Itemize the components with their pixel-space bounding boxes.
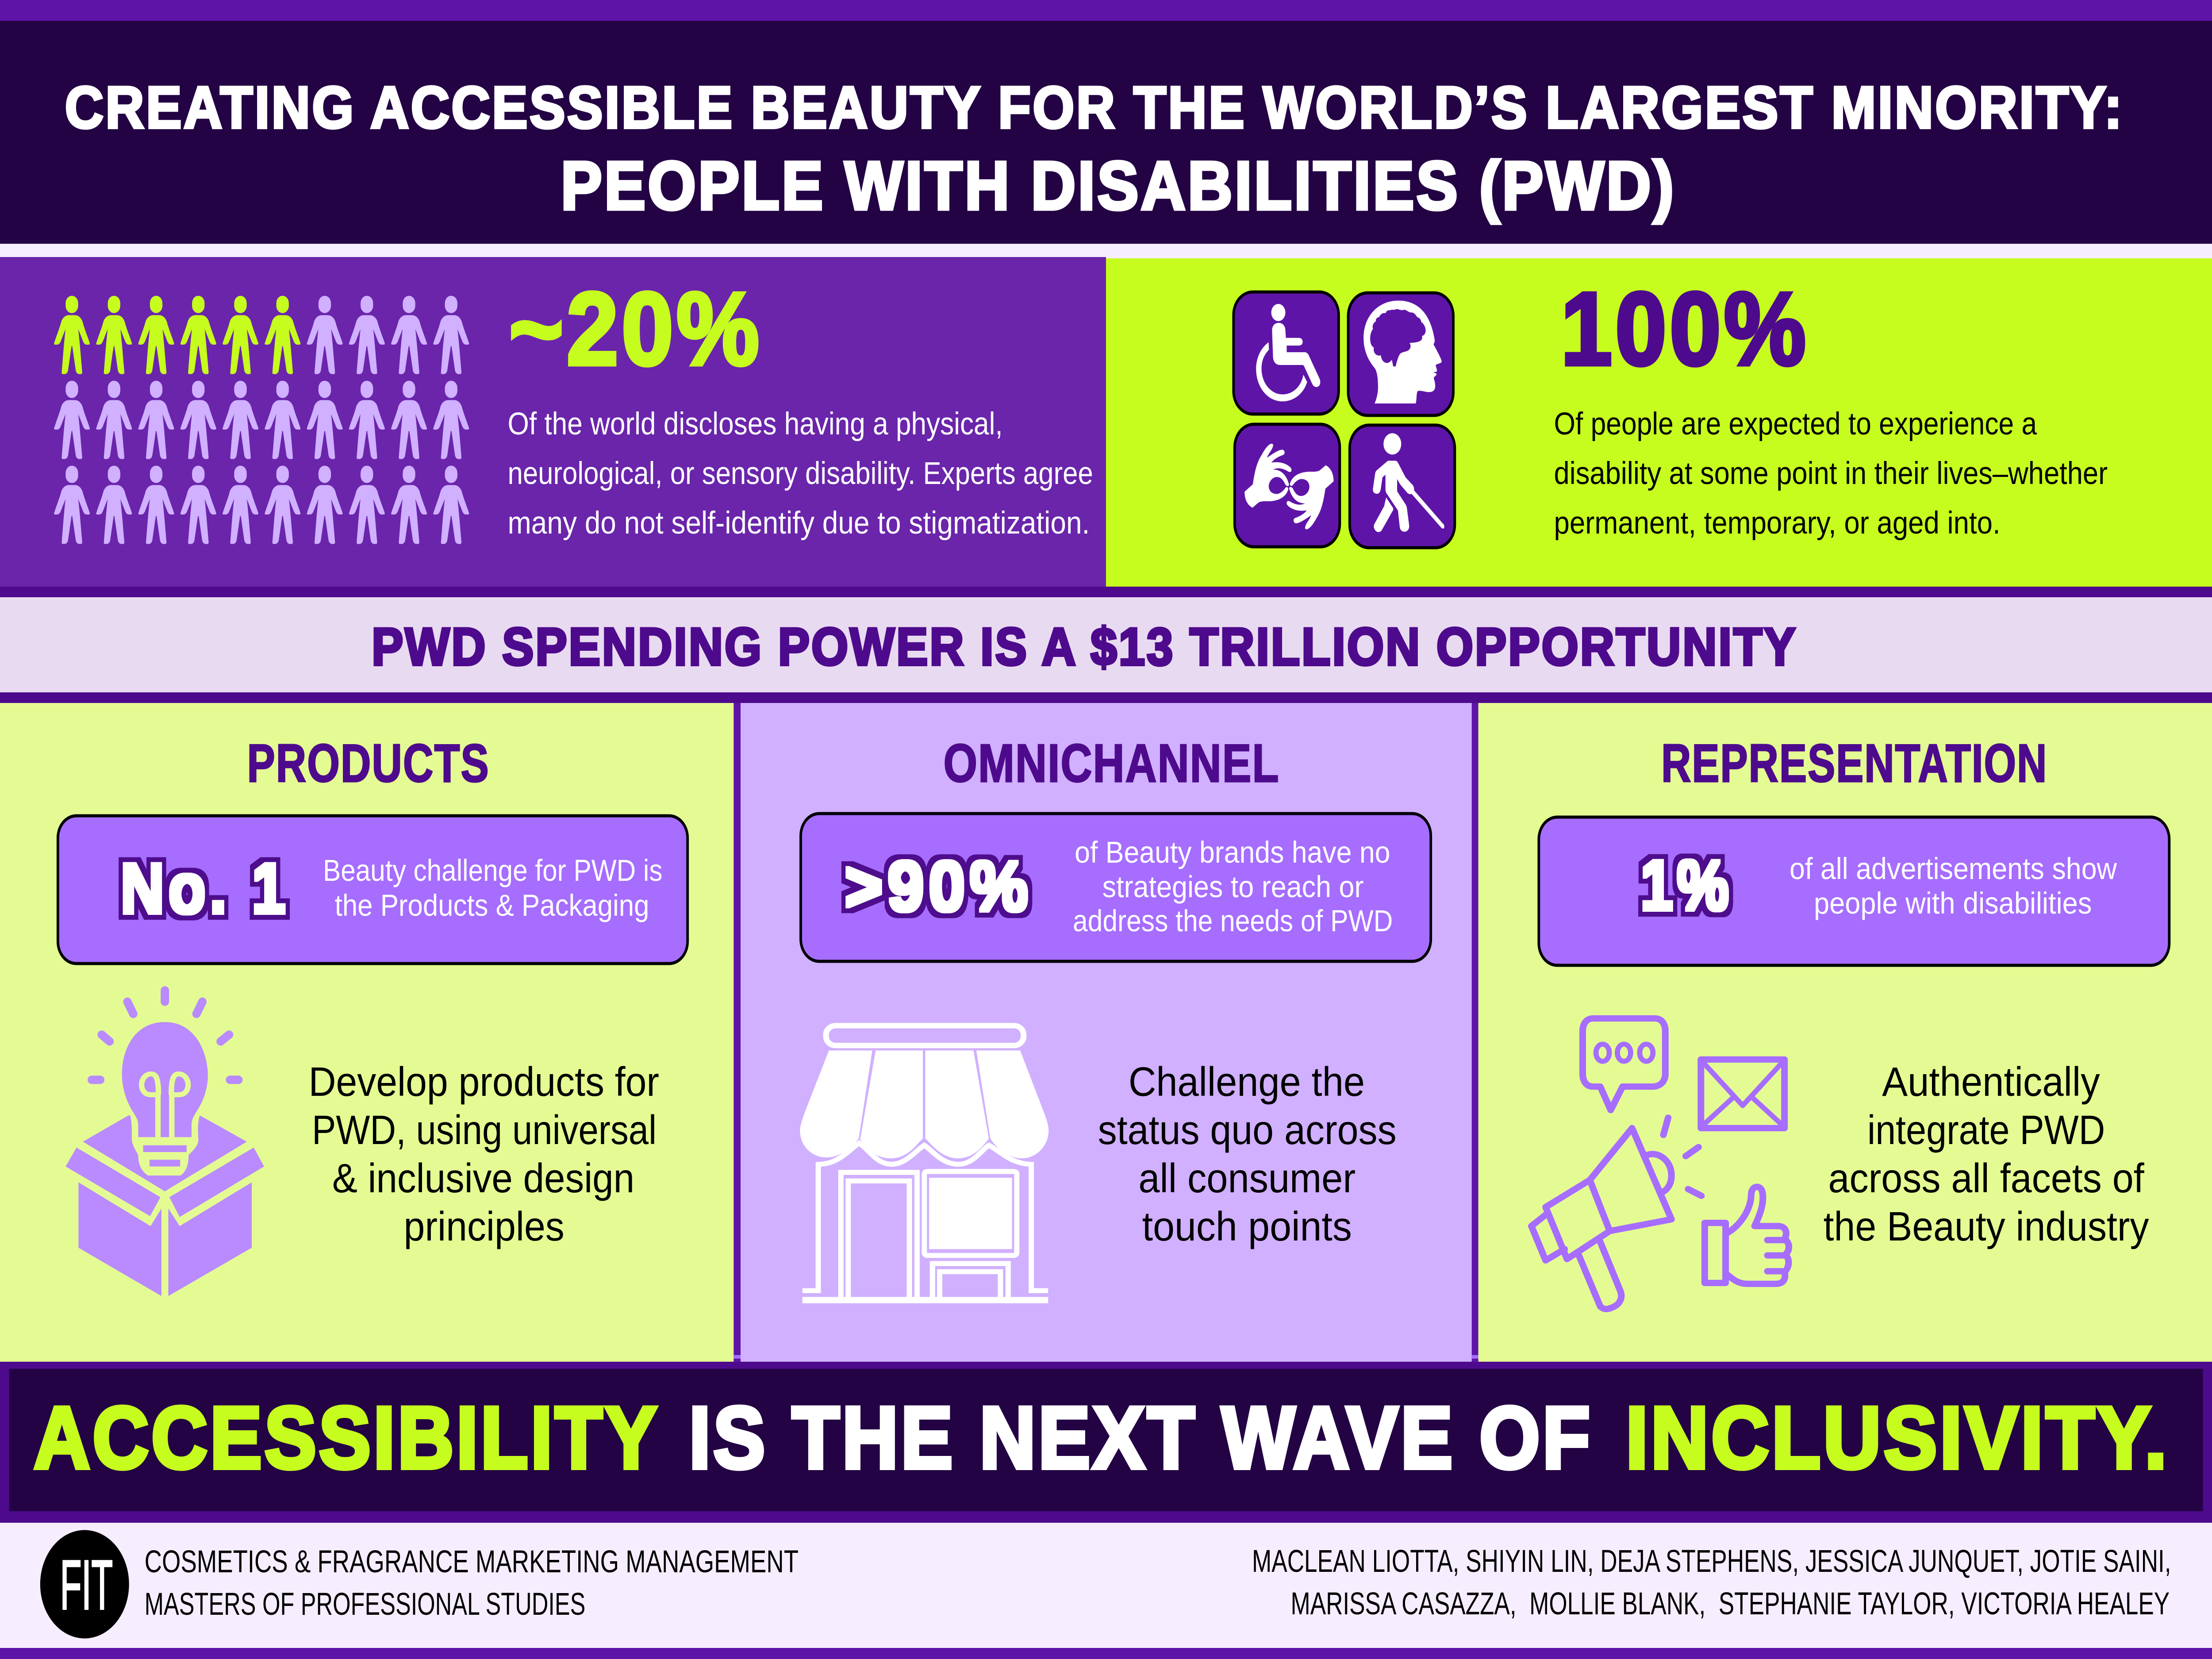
row 1 of people — [54, 296, 469, 374]
text: representation recommendation: integrate PWD — [1867, 1107, 2105, 1153]
stat: 1%: 1% — [1640, 847, 1733, 925]
description: 20 percent: neurological, or sensory disability. Experts agree — [508, 456, 1093, 491]
heading: omnichannel: OMNICHANNEL — [944, 733, 1280, 793]
footer — [40, 1530, 2171, 1639]
stat description: the Products & Packaging — [335, 889, 649, 922]
footer: authors — [1252, 1544, 2171, 1621]
stat: >90%: >90% — [845, 848, 1033, 926]
description: 20 percent: Of the world discloses having a physical, — [508, 406, 1003, 441]
icon: light bulb in box — [65, 991, 264, 1296]
text: omnichannel recommendation: Challenge the — [1129, 1059, 1365, 1105]
banner heading: PWD SPENDING POWER IS A $13 TRILLION OPPORTUNITY — [372, 617, 1797, 676]
stat description: of all advertisements show — [1790, 852, 2117, 886]
text: omnichannel recommendation — [1098, 1059, 1397, 1250]
description: 100 percent: permanent, temporary, or aged into. — [1554, 505, 2001, 540]
text: products recommendation: & inclusive design — [332, 1156, 634, 1202]
title line 1: CREATING ACCESSIBLE BEAUTY FOR THE WORLD’S LARGEST MINORITY: — [65, 74, 2124, 141]
row 2 of people — [54, 381, 469, 459]
stat description — [1790, 852, 2117, 920]
footer: program — [145, 1544, 799, 1621]
logo: FIT — [40, 1530, 129, 1639]
text: omnichannel recommendation: all consumer — [1138, 1156, 1356, 1202]
title line 2: PEOPLE WITH DISABILITIES (PWD) — [561, 148, 1676, 224]
icon: sign language hands — [1235, 424, 1340, 547]
text: products recommendation: Develop products for — [309, 1059, 659, 1105]
text: products recommendation — [309, 1059, 659, 1250]
icon: storefront — [800, 1025, 1048, 1300]
text: representation recommendation: the Beauty industry — [1824, 1204, 2149, 1250]
text: products recommendation: PWD, using universal — [312, 1107, 657, 1153]
spending power banner — [0, 597, 2212, 692]
footer: program: MASTERS OF PROFESSIONAL STUDIES — [145, 1586, 585, 1621]
description: 100 percent: Of people are expected to experience a — [1554, 406, 2037, 441]
stat description — [323, 854, 663, 922]
heading: products: PRODUCTS — [247, 733, 490, 793]
text: omnichannel recommendation: status quo across — [1098, 1107, 1397, 1153]
description: 20 percent: many do not self-identify due to stigmatization. — [508, 505, 1090, 540]
icon: megaphone, mail, chat and thumbs up — [1532, 1018, 1789, 1309]
icon: head with brain — [1348, 293, 1453, 415]
description: 100 percent — [1554, 406, 2108, 540]
text: products recommendation: principles — [404, 1204, 565, 1250]
text: representation recommendation: across all facets of — [1828, 1156, 2144, 1202]
panel: omnichannel — [741, 703, 1472, 1362]
closing banner — [0, 1362, 2212, 1523]
panel: products — [0, 703, 733, 1362]
stat description: Beauty challenge for PWD is — [323, 854, 662, 887]
icon: person with cane — [1350, 425, 1455, 548]
stat description: strategies to reach or — [1102, 870, 1363, 904]
panel: 20 percent statistic — [0, 257, 1106, 587]
stat description: people with disabilities — [1814, 887, 2092, 920]
panel: 100 percent statistic — [1106, 258, 2212, 587]
footer: program: COSMETICS & FRAGRANCE MARKETING MANAGEMENT — [145, 1544, 799, 1579]
stat box: 1 percent — [1539, 817, 2169, 965]
title banner — [0, 21, 2212, 244]
stat: No. 1: No. 1 — [120, 850, 290, 928]
statistic: ~20%: ~20% — [509, 271, 762, 387]
description: 20 percent — [508, 406, 1093, 540]
stat description: of Beauty brands have no — [1075, 836, 1390, 869]
stat box: over 90 percent — [801, 814, 1431, 961]
closing line: accessibility: ACCESSIBILITY — [34, 1389, 660, 1486]
description: 100 percent: disability at some point in their lives–whether — [1554, 456, 2108, 491]
heading: representation: REPRESENTATION — [1661, 733, 2047, 793]
icon tiles: disabilities — [1233, 292, 1455, 548]
statistic: 100%: 100% — [1561, 271, 1809, 387]
stat description — [1073, 836, 1393, 938]
icon: wheelchair — [1233, 292, 1339, 414]
closing line: inclusivity: INCLUSIVITY. — [1626, 1389, 2170, 1486]
logo: FIT: FIT — [60, 1546, 113, 1624]
text: representation recommendation: Authentically — [1882, 1059, 2100, 1105]
closing line: middle: IS THE NEXT WAVE OF — [689, 1389, 1593, 1486]
text: representation recommendation — [1824, 1059, 2149, 1250]
stat box: No. 1 — [58, 816, 687, 964]
panel: representation — [1479, 703, 2212, 1362]
text: omnichannel recommendation: touch points — [1142, 1204, 1352, 1250]
pictogram: 30 people, 6 highlighted — [54, 296, 469, 544]
row 3 of people — [54, 466, 469, 544]
stat description: address the needs of PWD — [1073, 904, 1393, 938]
